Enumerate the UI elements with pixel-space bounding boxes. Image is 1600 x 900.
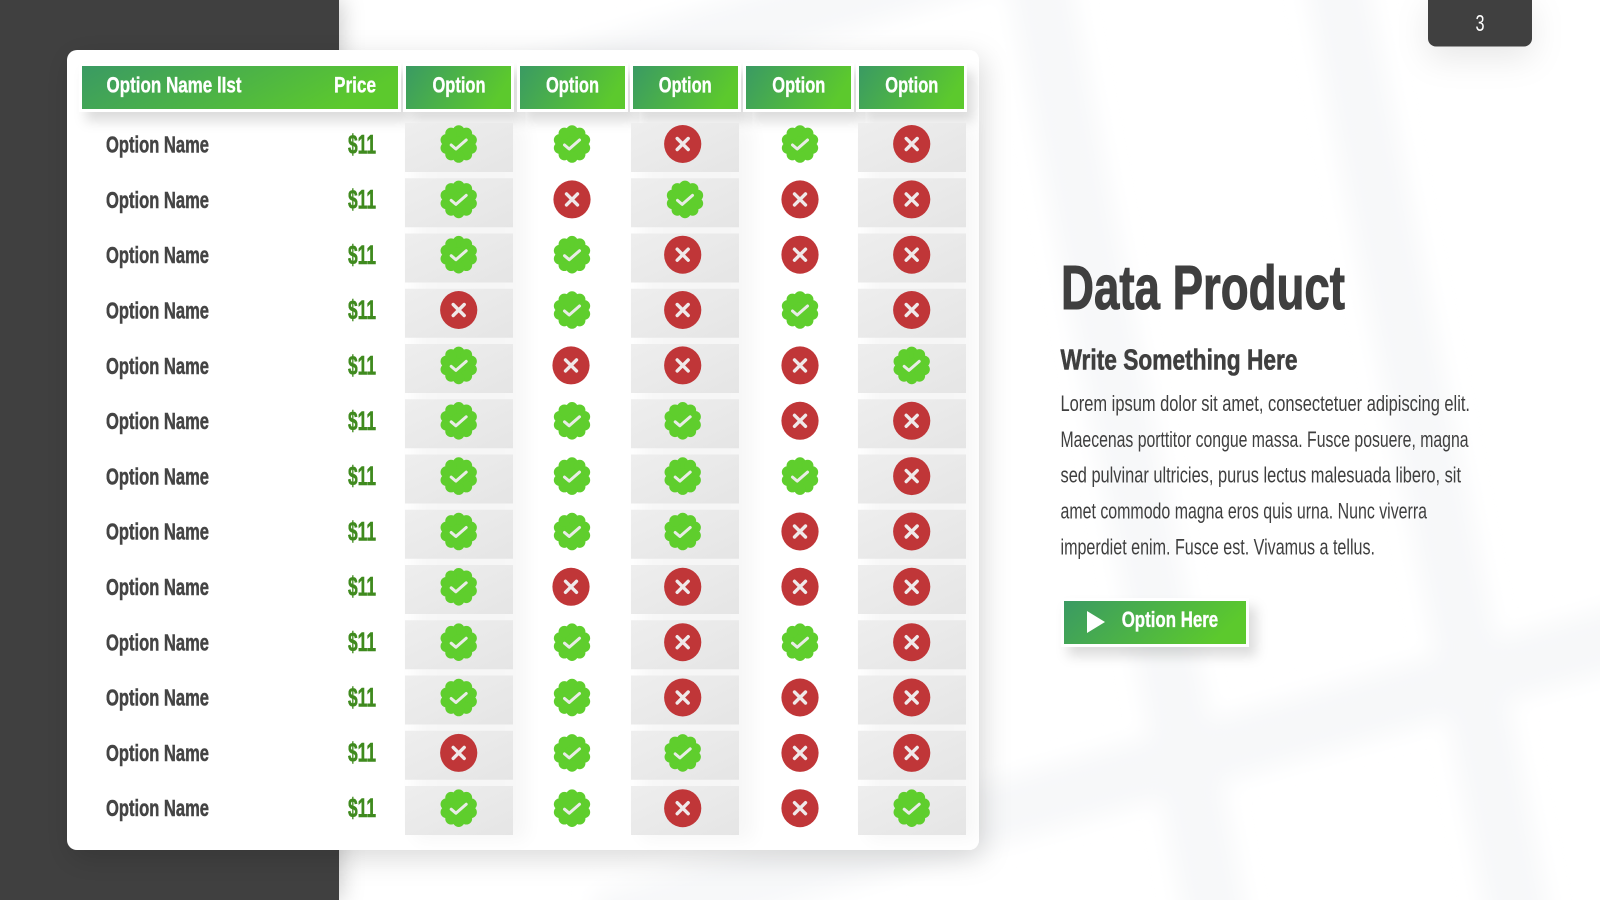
title: Data Product (1061, 254, 1345, 323)
table header: option 1 (403, 63, 514, 112)
body text: sed pulvinar ultricies, purus lectus malesuada libero, sit (1060, 463, 1462, 488)
table header: option 1: Option (432, 72, 486, 97)
row 8: Option Name (106, 519, 209, 545)
button (1061, 598, 1249, 647)
row 13: Option Name (106, 795, 209, 821)
row 11 (106, 676, 966, 724)
row 4 (106, 289, 966, 338)
row 13: $11 (348, 793, 376, 823)
table header: name and price: Price (334, 72, 376, 97)
row 1 (106, 123, 966, 172)
row 6: Option Name (106, 408, 209, 434)
table header: option 2 (517, 63, 628, 112)
row 10: $11 (348, 627, 376, 657)
row 7: $11 (348, 461, 376, 491)
table header: option 3: Option (659, 72, 712, 97)
body text: imperdiet enim. Fusce est. Vivamus a tellus. (1060, 535, 1375, 560)
row 2: Option Name (106, 187, 209, 213)
row 9 (106, 565, 966, 614)
row 9: Option Name (106, 574, 209, 600)
table header: option 4: Option (772, 72, 825, 97)
row 5 (106, 344, 966, 393)
table header: option 3 (630, 63, 741, 112)
row 10 (106, 620, 966, 669)
table header: option 5: Option (885, 72, 938, 97)
row 10: Option Name (106, 629, 209, 655)
table header: name and price (79, 63, 401, 112)
table header: option 4 (743, 63, 854, 112)
row 6 (106, 399, 966, 448)
row 11: $11 (348, 682, 376, 712)
body text: amet commodo magna eros quis urna. Nunc viverra (1060, 499, 1427, 524)
row 3 (106, 234, 966, 282)
body text (1060, 391, 1470, 560)
table header: name and price: Option Name lIst (106, 72, 242, 97)
row 2 (106, 178, 966, 227)
row 8 (106, 510, 966, 559)
row 12: $11 (348, 738, 376, 768)
row 3: Option Name (106, 242, 209, 268)
dark side panel (0, 0, 339, 900)
background pattern (500, 0, 1600, 900)
page number tab: 3 (1476, 10, 1484, 36)
row 1: Option Name (106, 132, 209, 158)
row 7 (106, 454, 966, 504)
panel: comparison table (67, 50, 979, 850)
row 13 (106, 786, 966, 835)
row 6: $11 (348, 406, 376, 436)
row 1: $11 (348, 129, 376, 159)
row 8: $11 (348, 516, 376, 546)
row 12 (106, 731, 966, 780)
page number tab (1428, 0, 1532, 46)
row 4: $11 (348, 295, 376, 325)
cell column shadows (415, 125, 976, 840)
table header: option 5 (856, 63, 967, 112)
icon: play triangle (1087, 611, 1105, 633)
table card (67, 50, 979, 850)
row 11: Option Name (106, 685, 209, 711)
row 2: $11 (348, 185, 376, 215)
row 3: $11 (348, 240, 376, 270)
row 4: Option Name (106, 298, 209, 324)
row 9: $11 (348, 572, 376, 602)
row 12: Option Name (106, 740, 209, 766)
row 5: Option Name (106, 353, 209, 379)
table header: option 2: Option (546, 72, 599, 97)
button: Option Here (1122, 607, 1218, 632)
subheading: Write Something Here (1060, 344, 1298, 376)
row 5: $11 (348, 350, 376, 380)
row 7: Option Name (106, 463, 209, 489)
